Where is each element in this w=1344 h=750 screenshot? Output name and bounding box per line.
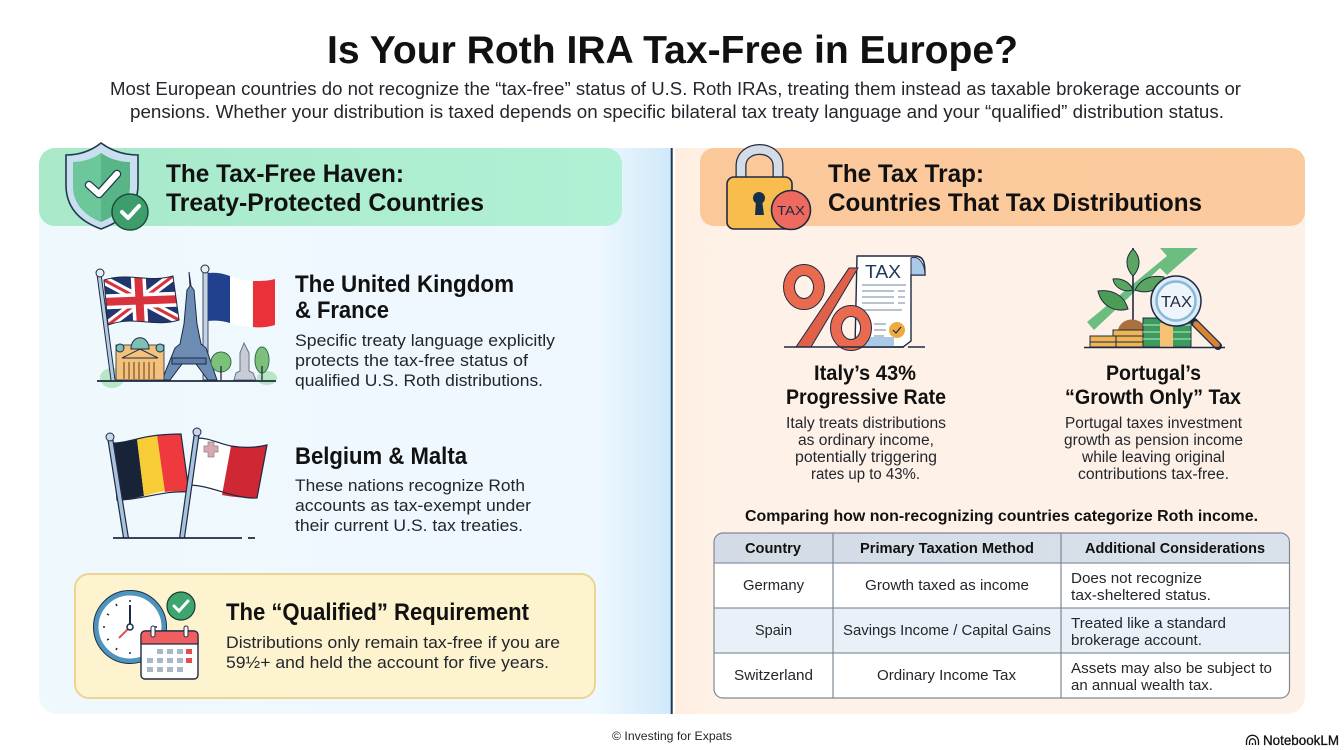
table row: Germany: Growth taxed as income [865, 577, 1029, 594]
section: Italy: rates up to 43%. [811, 466, 920, 483]
section: UK and France: qualified U.S. Roth distributions. [295, 371, 543, 390]
table row: Germany [743, 570, 1211, 604]
header text: tax-free haven: The Tax-Free Haven: [166, 160, 404, 188]
icon: shield with check [66, 143, 148, 230]
panel: tax-free haven [39, 143, 1339, 748]
icon: percent and tax document [784, 256, 925, 347]
callout text: 59½+ and held the account for five years. [226, 653, 549, 672]
table row: Spain: Spain [755, 622, 792, 639]
table row: Switzerland: Assets may also be subject to [1071, 660, 1272, 677]
section: Italy: as ordinary income, [798, 432, 934, 449]
header band: tax-free haven [39, 148, 622, 226]
table row: Switzerland: an annual wealth tax. [1071, 677, 1213, 694]
icon: plant, coins and magnifier [1084, 248, 1225, 348]
header text: tax trap [828, 160, 1202, 217]
section: UK and France: The United Kingdom [295, 271, 514, 298]
section: Portugal: contributions tax-free. [1078, 466, 1229, 483]
footer credit: © Investing for Expats [612, 729, 732, 743]
section: UK and France: Specific treaty language explicitly [295, 331, 556, 350]
section: UK and France: & France [295, 297, 389, 324]
icon: Belgium and Malta flags [106, 428, 267, 538]
intro text: pensions. Whether your distribution is taxed depends on specific bilateral tax treaty language and your “qualified” distribution status. [130, 102, 1224, 122]
section: Belgium and Malta: Belgium & Malta [295, 443, 468, 470]
table row: Germany: Does not recognize [1071, 570, 1202, 587]
panel: tax trap [675, 148, 1305, 714]
table header row: Additional Considerations [1085, 540, 1265, 557]
icon: UK and France flags with landmarks [96, 265, 277, 388]
header text: tax trap: Countries That Tax Distributions [828, 189, 1202, 217]
callout: qualified requirement [75, 574, 595, 698]
table row: Spain: Treated like a standard [1071, 615, 1226, 632]
section: UK and France: protects the tax-free status of [295, 351, 528, 370]
section: Italy: Italy treats distributions [786, 415, 946, 432]
table row: Switzerland: Ordinary Income Tax [877, 667, 1016, 684]
section: Portugal: while leaving original [1081, 449, 1225, 466]
header text: tax trap: The Tax Trap: [828, 160, 984, 188]
section: Italy: Italy’s 43% [814, 362, 916, 385]
header band: tax trap [700, 148, 1305, 226]
table header row [745, 540, 1265, 557]
section: UK and France [295, 271, 556, 390]
icon: padlock with tax badge: TAX [777, 203, 805, 218]
table row: Germany: Germany [743, 577, 804, 594]
section: Portugal [1064, 362, 1243, 483]
table heading: Comparing how non-recognizing countries categorize Roth income. [745, 508, 1258, 525]
intro text: Most European countries do not recognize the “tax-free” status of U.S. Roth IRAs, treating them instead as taxable brokerage accounts or [110, 79, 1241, 99]
table row: Germany: tax-sheltered status. [1071, 587, 1211, 604]
section: Italy [786, 362, 946, 483]
section: Italy: potentially triggering [795, 449, 937, 466]
table row: Switzerland [734, 660, 1272, 694]
section: Portugal: “Growth Only” Tax [1065, 386, 1241, 409]
header text: tax-free haven [166, 160, 484, 217]
icon: plant, coins and magnifier: TAX [1161, 294, 1192, 311]
icon: percent and tax document: TAX [865, 262, 901, 282]
intro text [110, 79, 1241, 122]
table header row: Primary Taxation Method [860, 540, 1034, 557]
comparison table [714, 533, 1290, 698]
NotebookLM logo: NotebookLM [1263, 732, 1339, 748]
table row: Spain: brokerage account. [1071, 632, 1202, 649]
icon: clock and calendar [94, 590, 198, 679]
table header row: Country [745, 540, 802, 557]
table row: Spain: Savings Income / Capital Gains [843, 622, 1051, 639]
table row: Spain [755, 615, 1226, 649]
callout text: Distributions only remain tax-free if you are [226, 633, 560, 652]
callout text [226, 599, 560, 672]
section: Belgium and Malta: These nations recognize Roth [295, 476, 525, 495]
callout text: The “Qualified” Requirement [226, 599, 529, 626]
icon: padlock with tax badge [727, 150, 810, 230]
section: Belgium and Malta [295, 443, 531, 535]
section: Portugal: Portugal taxes investment [1065, 415, 1243, 432]
section: Belgium and Malta: their current U.S. tax treaties. [295, 516, 523, 535]
table row: Switzerland: Switzerland [734, 667, 813, 684]
section: Italy: Progressive Rate [786, 386, 946, 409]
section: Portugal: Portugal’s [1106, 362, 1201, 385]
section: Belgium and Malta: accounts as tax-exempt under [295, 496, 531, 515]
section: Portugal: growth as pension income [1064, 432, 1243, 449]
title: Is Your Roth IRA Tax-Free in Europe? [327, 29, 1018, 72]
header text: tax-free haven: Treaty-Protected Countries [166, 189, 484, 217]
